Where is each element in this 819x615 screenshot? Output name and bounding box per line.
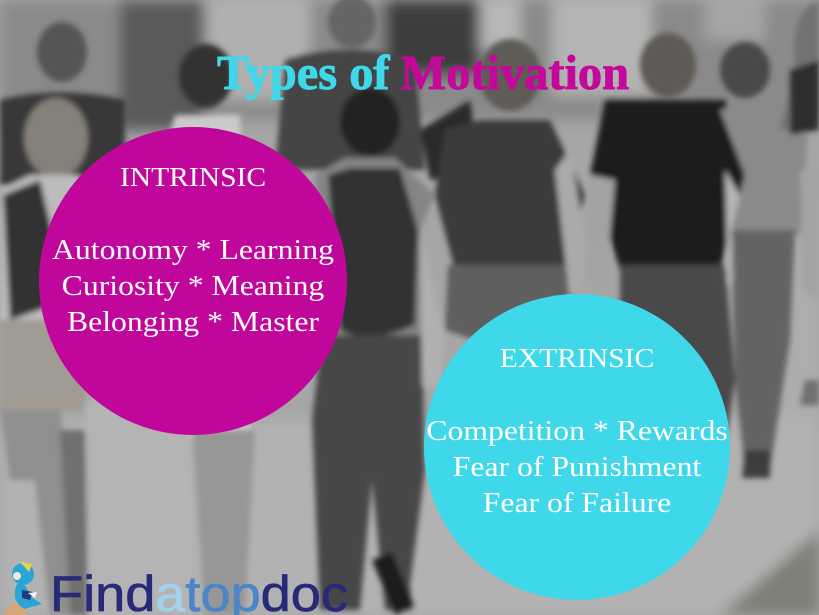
icon: bird mascot: [4, 562, 42, 615]
far right man: [720, 42, 770, 98]
text: extrinsic motivators: Competition * Rewards: [426, 415, 728, 447]
right man: [640, 33, 696, 97]
logo: Findatopdoc: [4, 562, 348, 615]
panel: intrinsic circle: [39, 127, 347, 435]
left top person: [37, 22, 87, 82]
dark t-shirt person: [479, 39, 541, 111]
text: intrinsic motivators: Belonging * Master: [67, 306, 319, 338]
heading: extrinsic: EXTRINSIC: [500, 343, 654, 373]
checked-shirt person: [275, 50, 425, 170]
text: extrinsic motivators: [426, 415, 728, 519]
text: extrinsic motivators: Fear of Punishment: [453, 451, 701, 483]
centre person: [340, 88, 400, 156]
text: intrinsic motivators: Curiosity * Meaning: [62, 270, 324, 302]
title: Types ofMotivation: [217, 47, 629, 100]
text: extrinsic motivators: Fear of Failure: [483, 487, 671, 519]
woman in jeans centre-left: [179, 44, 233, 108]
panel: extrinsic circle: [424, 294, 730, 600]
left woman: [24, 98, 88, 178]
girl behind: [420, 100, 480, 180]
text: intrinsic motivators: Autonomy * Learning: [52, 234, 334, 266]
heading: intrinsic: INTRINSIC: [120, 162, 266, 192]
text: intrinsic motivators: [52, 234, 334, 338]
